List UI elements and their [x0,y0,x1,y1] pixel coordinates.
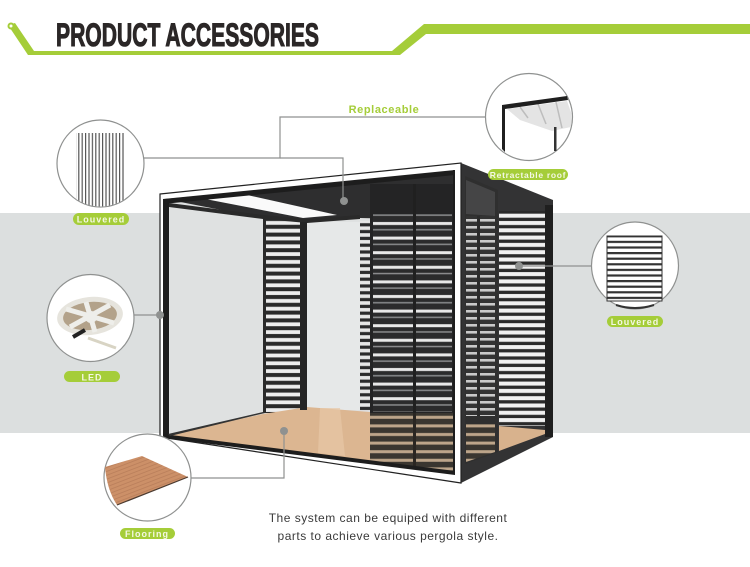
front right slat panel [370,184,455,413]
far left panel [360,221,370,411]
back opening [307,222,360,410]
header rule [8,22,750,55]
floor back edge [168,412,265,436]
back post [300,222,307,410]
pergola side wall [461,163,553,483]
floor [167,407,370,462]
ceiling [165,172,455,222]
pergola outer white [160,163,461,483]
right floor [499,426,545,451]
connector dots [156,197,523,435]
title: PRODUCT ACCESSORIES [56,17,319,53]
badge: LED: LED [82,372,102,382]
side slat panel [465,176,498,464]
callout: LED [47,274,134,362]
caption: The system can be equiped with different [269,511,507,525]
callout: flooring [104,434,191,521]
left beam [169,203,360,223]
caption [269,511,507,543]
label: Replaceable: Replaceable [349,104,419,116]
skylight [200,195,337,218]
pergola interior [163,171,455,474]
badge: LED [64,371,120,382]
inner frame [163,200,169,436]
pergola [160,163,553,483]
background band [0,213,750,433]
callout: louvered left [57,120,144,207]
callout: retractable roof [486,74,572,160]
badge: Flooring: Flooring [125,529,169,539]
back left slat panel [263,218,307,413]
right slat panel [499,211,545,426]
right post [545,205,553,437]
lower slat panel [370,413,455,473]
front outlines [160,163,461,483]
badge: Louvered: Louvered [77,214,125,224]
caption: parts to achieve various pergola style. [278,529,498,543]
connector lines [133,117,592,478]
badge: Louvered right: Louvered [611,317,659,327]
badge: Retractable roof: Retractable roof [490,170,566,180]
callout: louvered right [592,222,678,309]
